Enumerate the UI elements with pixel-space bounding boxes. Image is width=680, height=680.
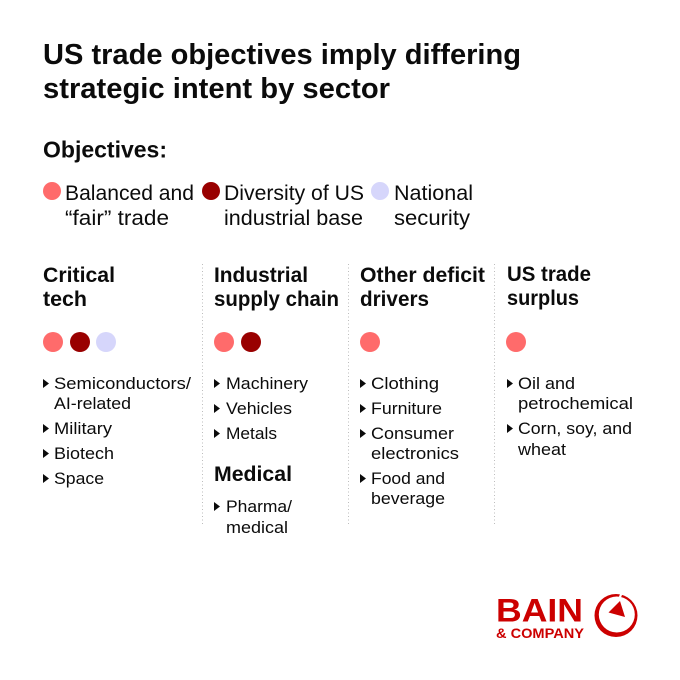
heading: objectives: Objectives:	[43, 136, 167, 162]
objective dots	[214, 332, 261, 352]
logo: Bain & Company: & COMPANY	[496, 626, 584, 641]
logo: Bain & Company: BAIN	[496, 592, 583, 628]
heading: other deficit drivers: drivers	[360, 288, 429, 311]
legend	[43, 182, 473, 230]
bullet list: Food and	[371, 469, 445, 488]
objective dot	[360, 332, 380, 352]
heading: medical: Medical	[214, 463, 292, 486]
bullet list	[43, 374, 191, 488]
panel: industrial supply chain and medical	[214, 264, 339, 537]
legend item: diversity of US industrial base: industrial base	[224, 207, 363, 230]
heading: US trade surplus: US trade	[507, 263, 591, 286]
bullet list: Semiconductors/	[54, 374, 191, 393]
icon: Bain circle	[594, 592, 638, 637]
heading: US trade surplus: surplus	[507, 287, 579, 310]
heading: industrial supply chain: Industrial	[214, 264, 308, 287]
panel: US trade surplus	[506, 263, 633, 459]
bullet list: petrochemical	[518, 394, 633, 413]
logo: Bain & Company	[496, 592, 638, 641]
bullet list: AI-related	[54, 394, 131, 413]
panel: critical tech	[43, 264, 191, 488]
bullet list: Biotech	[54, 444, 114, 463]
bullet list: Space	[54, 469, 104, 488]
bullet list: Corn, soy, and	[518, 419, 632, 438]
bullet list: medical	[214, 497, 292, 537]
legend item: national security: security	[394, 207, 471, 230]
bullet list: Oil and	[518, 374, 575, 393]
title: strategic intent by sector	[43, 73, 390, 105]
bullet list	[360, 374, 459, 508]
heading: industrial supply chain	[214, 264, 339, 311]
legend item: national security	[371, 182, 473, 230]
heading: other deficit drivers: Other deficit	[360, 264, 485, 287]
bullet list: Clothing	[371, 374, 439, 393]
bullet list: beverage	[371, 489, 445, 508]
objective dots	[43, 332, 116, 352]
bullet list: Military	[54, 419, 113, 438]
heading: US trade surplus	[507, 263, 591, 310]
bullet list: Consumer	[371, 424, 454, 443]
bullet list: Furniture	[371, 399, 442, 418]
bullet list: Machinery	[226, 374, 309, 393]
legend item: balanced and fair trade: “fair” trade	[65, 207, 169, 230]
bullet list: electronics	[371, 444, 459, 463]
legend item: balanced and fair trade: Balanced and	[65, 182, 194, 205]
heading: critical tech: Critical	[43, 264, 115, 287]
bullet list: medical: medical	[226, 518, 288, 537]
title: US trade objectives imply differing	[43, 39, 521, 71]
legend item: national security: National	[394, 182, 473, 205]
legend item: balanced and fair trade	[43, 182, 194, 230]
bullet list	[214, 374, 309, 443]
objective dot	[506, 332, 526, 352]
panel: other deficit drivers	[360, 264, 485, 508]
title	[43, 39, 521, 105]
legend item: diversity of US industrial base: Diversity of US	[224, 182, 364, 205]
bullet list: Vehicles	[226, 399, 292, 418]
bullet list	[507, 374, 633, 459]
heading: critical tech: tech	[43, 288, 87, 311]
bullet list: medical: Pharma/	[226, 497, 292, 516]
heading: other deficit drivers	[360, 264, 485, 311]
heading: industrial supply chain: supply chain	[214, 288, 339, 311]
bullet list: Metals	[226, 424, 277, 443]
bullet list: wheat	[517, 440, 566, 459]
heading: critical tech	[43, 264, 115, 311]
legend item: diversity of US industrial base	[202, 182, 364, 230]
